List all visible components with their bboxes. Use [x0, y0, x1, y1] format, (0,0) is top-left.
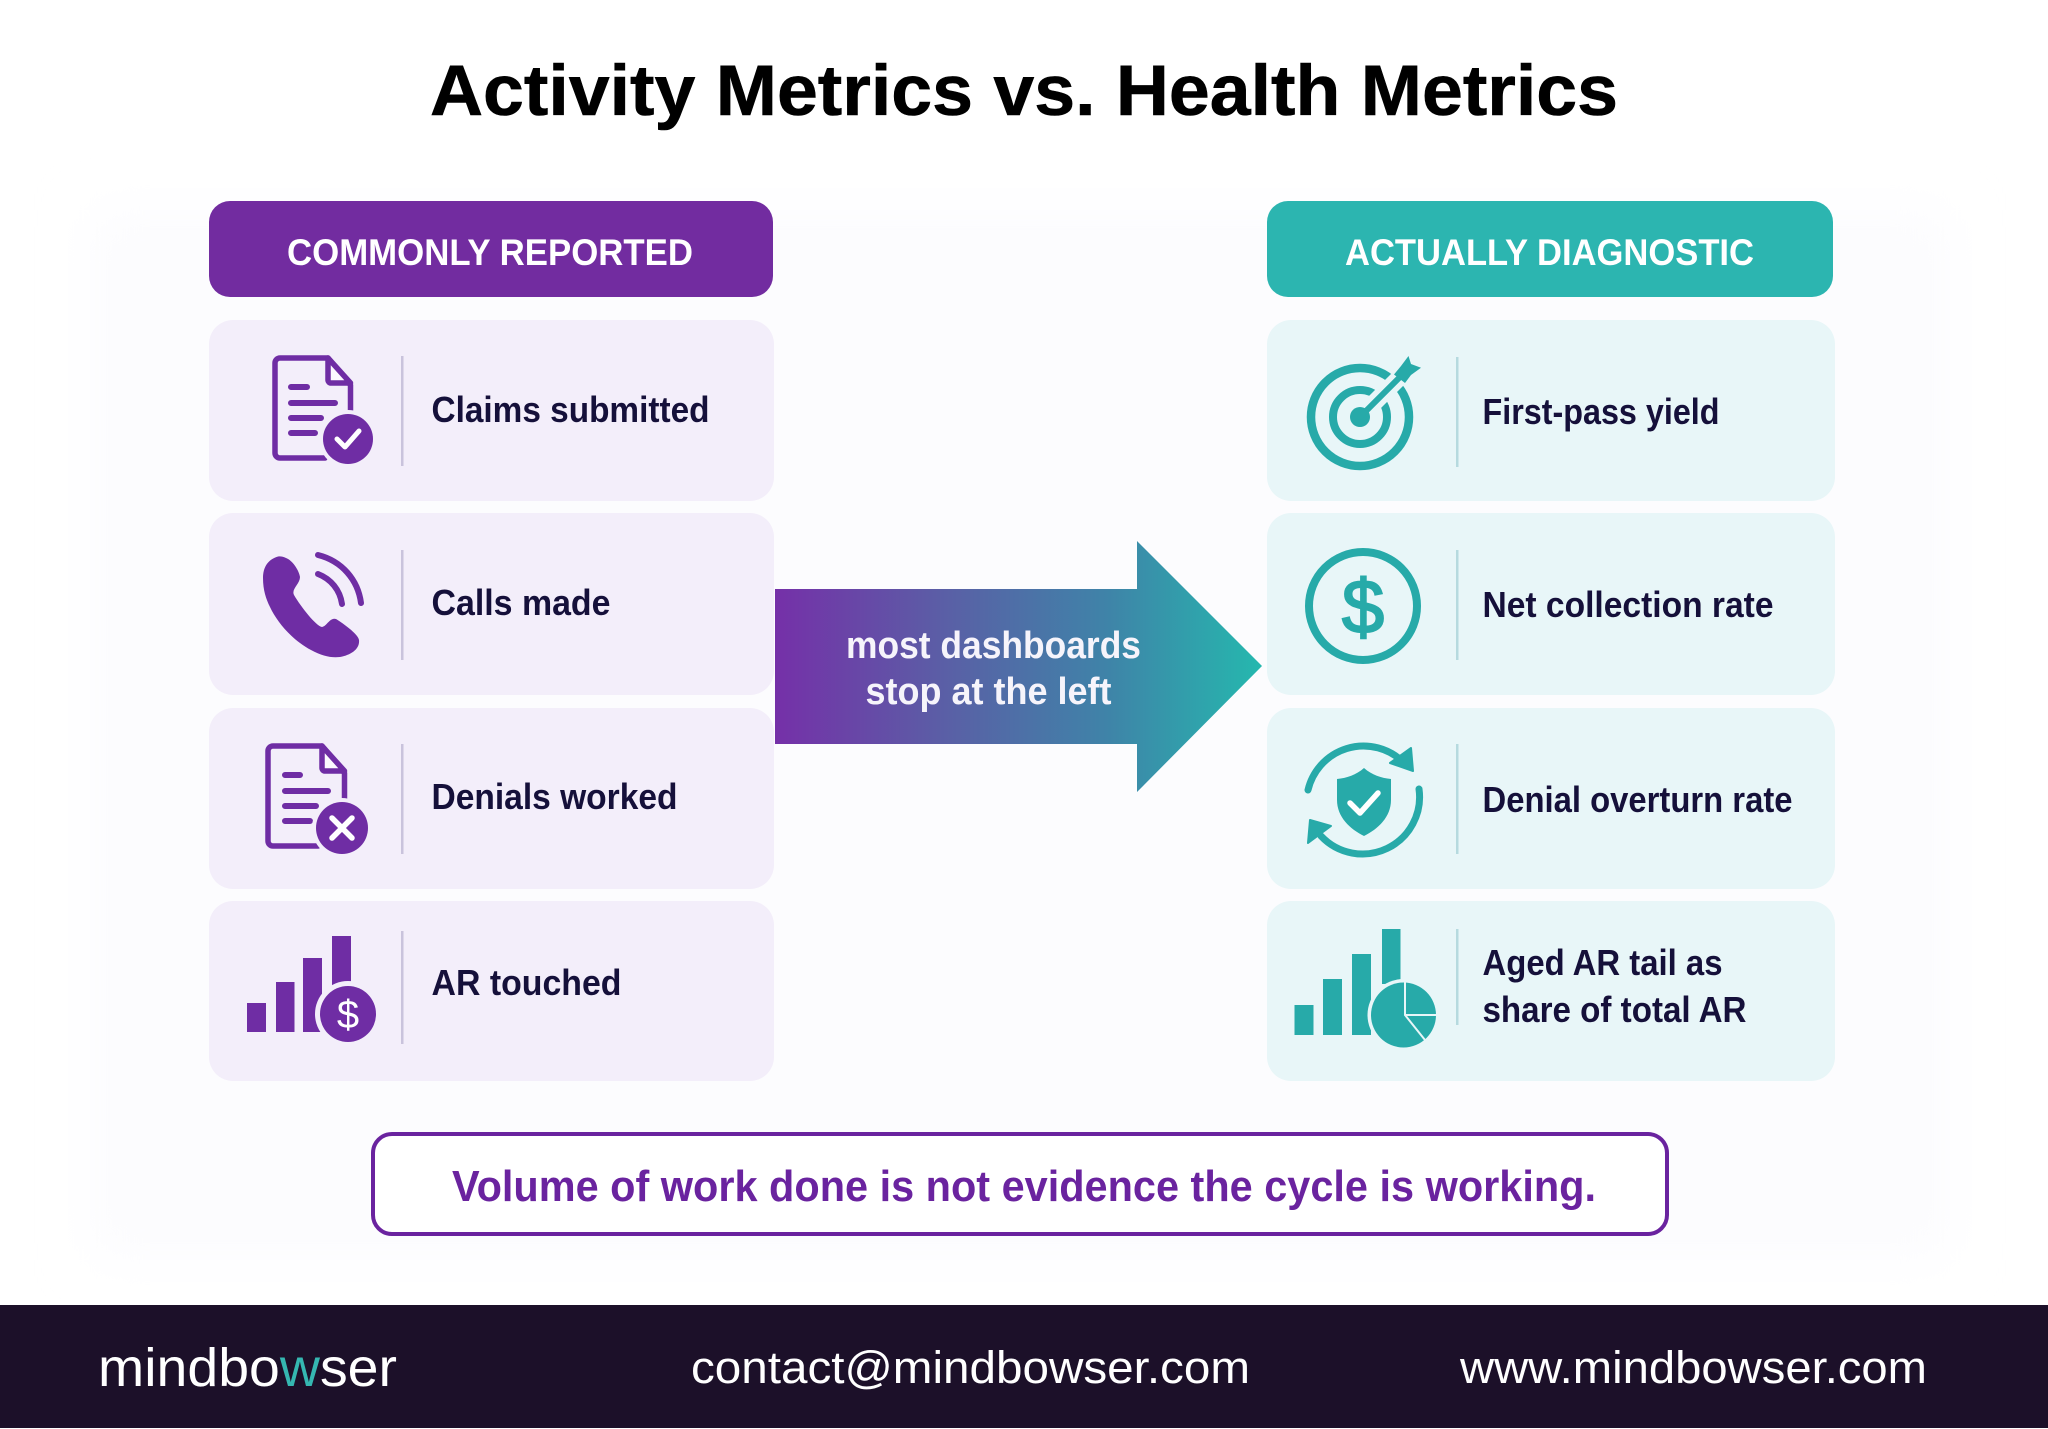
label: denial overturn rate: Denial overturn rate: [1482, 779, 1792, 820]
row: denial overturn rate: [1267, 708, 1835, 889]
contact email: contact@mindbowser.com: [691, 1342, 1250, 1393]
label: AR touched: AR touched: [432, 962, 622, 1003]
callout: Volume of work done is not evidence the cycle is working.: [452, 1162, 1596, 1211]
label: net collection rate: Net collection rate: [1482, 584, 1774, 625]
website: www.mindbowser.com: [1459, 1342, 1927, 1393]
row: calls made: [209, 513, 774, 695]
icon: document with check: [275, 358, 377, 468]
row: first-pass yield: [1267, 320, 1835, 501]
logo: mindbowser: mindbowser: [98, 1338, 397, 1398]
heading: commonly reported: [209, 201, 773, 297]
icon: bars with dollar: [247, 936, 381, 1047]
arrow: most dashboards stop at the left: most dashboards: [846, 625, 1141, 667]
icon: dollar circle: $: [1342, 565, 1384, 650]
panel: commonly reported: [209, 201, 774, 1081]
row: denials worked: [209, 708, 774, 889]
icon: dollar circle: [1309, 552, 1417, 660]
icon: shield with cycle arrows: [1308, 746, 1420, 854]
title: Activity Metrics vs. Health Metrics: [430, 52, 1618, 131]
icon: target with arrow: [1311, 356, 1421, 466]
arrow: most dashboards stop at the left: stop at the left: [866, 671, 1112, 713]
callout: [373, 1134, 1667, 1234]
icon: bars with pie chart: [1294, 929, 1440, 1051]
panel: actually diagnostic: [1267, 201, 1835, 1081]
heading: commonly reported: COMMONLY REPORTED: [287, 232, 693, 273]
label: aged AR tail as share of total AR: Aged AR tail as: [1482, 942, 1722, 983]
label: calls made: Calls made: [432, 582, 610, 623]
row: claims submitted: [209, 320, 774, 501]
row: aged AR tail: [1267, 901, 1835, 1081]
icon: bars with dollar: $: [337, 993, 359, 1037]
label: aged AR tail as share of total AR: [1482, 942, 1746, 1030]
row: net collection rate: [1267, 513, 1835, 695]
heading: actually diagnostic: [1267, 201, 1833, 297]
icon: phone: [263, 555, 361, 657]
label: claims submitted: Claims submitted: [432, 389, 710, 430]
arrow: most dashboards stop at the left: [775, 541, 1262, 792]
label: denials worked: Denials worked: [432, 776, 678, 817]
footer: [0, 1305, 2048, 1428]
label: first-pass yield: First-pass yield: [1482, 391, 1720, 432]
heading: actually diagnostic: ACTUALLY DIAGNOSTIC: [1345, 232, 1754, 273]
row: AR touched: [209, 901, 774, 1081]
icon: document with x: [268, 746, 372, 858]
label: aged AR tail as share of total AR: share of total AR: [1482, 989, 1746, 1030]
